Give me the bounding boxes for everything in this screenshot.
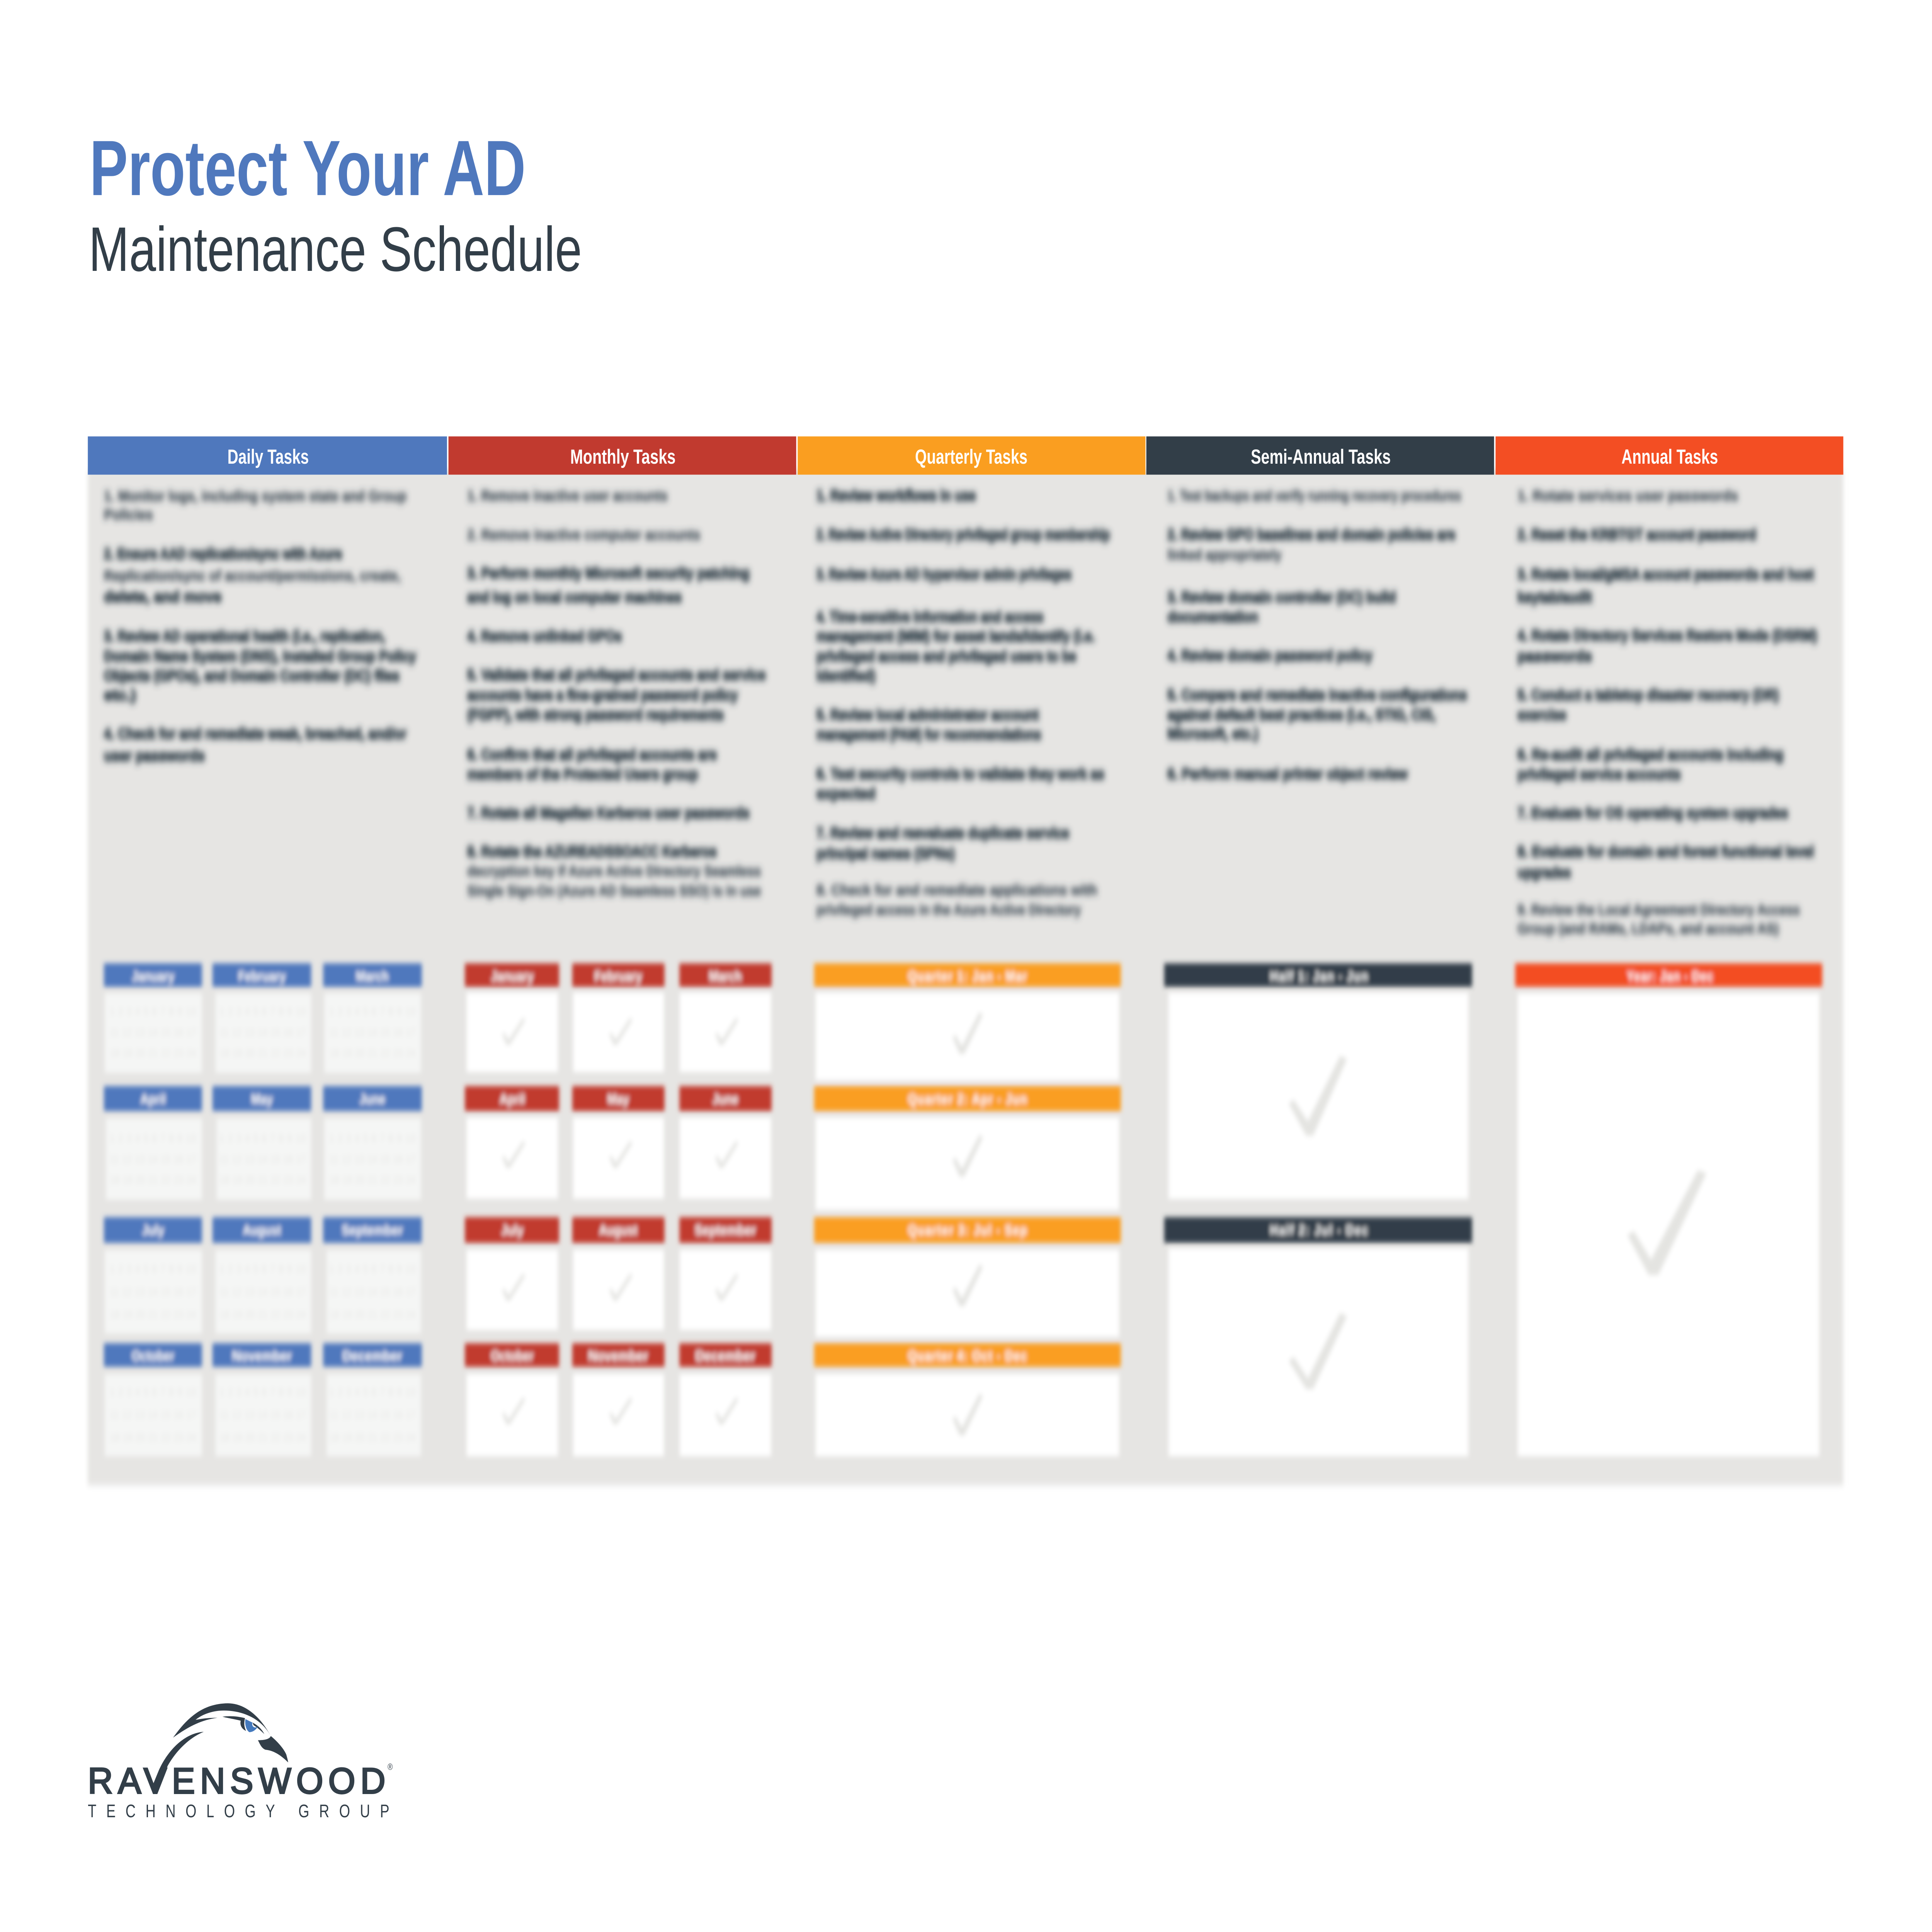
task list: daily: Replication/sync of account/permissions, create, — [104, 567, 401, 584]
month checklist: daily: 11 12 13 14 15 16 17 — [219, 1408, 306, 1421]
task list: annual: passwords — [1517, 647, 1592, 665]
task list: monthly: 3. Perform monthly Microsoft security patching — [467, 564, 750, 582]
month checklist: daily: 11 12 13 14 15 16 17 — [329, 1285, 416, 1298]
quarter checklist: Quarter 3: Jul - Sep — [908, 1223, 1027, 1238]
month checklist: daily: 1 2 3 4 5 6 7 8 9 10 — [329, 1386, 416, 1398]
quarter checklist: Quarter 4: Oct - Dec — [908, 1348, 1027, 1364]
month checklist: daily: 18 19 20 21 22 23 24 — [329, 1431, 416, 1444]
month checklist: daily: 11 12 13 14 15 16 17 — [219, 1026, 306, 1039]
month checklist: monthly: January — [491, 969, 534, 985]
task list: annual: 3. Rotate local/gMSA account passwords and host — [1517, 565, 1814, 583]
task list: quarterly: 2. Review Active Directory privileged group membership — [816, 526, 1110, 543]
task list: quarterly — [816, 486, 1110, 918]
month checklist: daily: May — [251, 1091, 273, 1107]
month checklist: daily: 11 12 13 14 15 16 17 — [329, 1408, 416, 1421]
month checklist: daily: November — [232, 1348, 292, 1364]
task list: daily — [104, 488, 417, 765]
month checklist: daily: 18 19 20 21 22 23 24 — [219, 1431, 306, 1444]
task list: monthly: 8. Rotate the AZUREADSSOACC Kerberos — [467, 843, 717, 861]
task list: annual: Group (and RAMs, LDAPs, and account AS) — [1517, 920, 1779, 937]
month checklist: daily: 11 12 13 14 15 16 17 — [110, 1408, 196, 1421]
task list: quarterly: 5. Review local administrator account — [816, 706, 1039, 724]
task list: daily: 2. Ensure AAD replication/sync with Azure — [104, 545, 342, 563]
task list: monthly: 2. Remove inactive computer accounts — [467, 526, 701, 543]
task list: annual — [1517, 487, 1817, 937]
task list: quarterly: 8. Check for and remediate applications with — [816, 882, 1097, 899]
task list: semi-annual: documentation — [1167, 608, 1259, 626]
header: Monthly Tasks: Monthly Tasks — [570, 446, 675, 468]
month checklist: daily: 1 2 3 4 5 6 7 8 9 10 — [219, 1386, 306, 1398]
task list: quarterly: privileged access in the Azure Active Directory — [816, 901, 1081, 918]
header: Semi-Annual Tasks: Semi-Annual Tasks — [1251, 446, 1391, 468]
task list: monthly: accounts have a fine-grained password policy — [467, 686, 738, 704]
month checklist: monthly: April — [500, 1091, 525, 1107]
half-year checklist: Half 2: Jul - Dec — [1270, 1223, 1368, 1238]
header: Annual Tasks: Annual Tasks — [1621, 446, 1718, 468]
task list: quarterly: management (PAM) for recommendations — [816, 726, 1041, 743]
month checklist: daily: 11 12 13 14 15 16 17 — [329, 1026, 416, 1039]
task list: semi-annual: 3. Review domain controller (DC) build — [1167, 588, 1396, 606]
subtitle: Maintenance Schedule: Maintenance Schedule — [89, 214, 582, 284]
month checklist: daily: 11 12 13 14 15 16 17 — [219, 1285, 306, 1298]
month checklist: daily: 11 12 13 14 15 16 17 — [329, 1153, 416, 1166]
icon: raven head — [153, 1703, 288, 1793]
month checklist: daily: 18 19 20 21 22 23 24 — [329, 1308, 416, 1321]
month checklist: monthly: July — [501, 1223, 524, 1238]
task list: quarterly: 7. Review and reevaluate duplicate service — [816, 824, 1069, 842]
task list: annual: privileged service accounts — [1517, 765, 1681, 783]
panel background — [88, 470, 1843, 1487]
task list: daily: delete, and move — [104, 588, 221, 605]
panel: daily tasks — [88, 436, 447, 1456]
month checklist: daily: December — [342, 1348, 402, 1364]
header: Daily Tasks: Daily Tasks — [228, 446, 309, 468]
task list: monthly — [467, 487, 766, 900]
half-year checklist — [1164, 963, 1472, 1456]
panel: monthly tasks — [449, 436, 796, 1456]
logo: Ravenswood Technology Group — [88, 1703, 393, 1821]
month checklist: daily: October — [132, 1348, 174, 1364]
task list: monthly: 7. Rotate all Magellan Kerberos user passwords — [467, 804, 750, 822]
quarter checklist: Quarter 2: Apr - Jun — [908, 1091, 1027, 1107]
task list: annual: keytab/audit — [1517, 588, 1592, 606]
year checklist: Year: Jan - Dec — [1627, 969, 1713, 985]
month checklist: daily: 18 19 20 21 22 23 24 — [219, 1308, 306, 1321]
half-year checklist: Half 1: Jan - Jun — [1270, 969, 1368, 985]
month checklist: monthly: December — [696, 1348, 755, 1364]
month checklist: daily: August — [243, 1223, 281, 1238]
month checklist: daily: 11 12 13 14 15 16 17 — [110, 1026, 196, 1039]
task list: monthly: members of the Protected Users group — [467, 765, 698, 783]
task list: daily: Objects (GPOs), and Domain Controller (DC) files — [104, 667, 400, 685]
month checklist: daily: 18 19 20 21 22 23 24 — [110, 1046, 196, 1060]
task list: quarterly: 1. Review workflows in use — [816, 486, 976, 504]
month checklist: daily: 11 12 13 14 15 16 17 — [110, 1285, 196, 1298]
task list: annual: 5. Conduct a tabletop disaster recovery (DR) — [1517, 686, 1779, 704]
header: Monthly Tasks — [449, 436, 796, 474]
header: Annual Tasks — [1495, 436, 1843, 474]
month checklist: daily: 1 2 3 4 5 6 7 8 9 10 — [329, 1262, 416, 1276]
month checklist: monthly: August — [599, 1223, 638, 1238]
month checklist: monthly: May — [607, 1091, 629, 1107]
month checklist: daily: 11 12 13 14 15 16 17 — [110, 1153, 196, 1166]
month checklist: monthly — [465, 963, 772, 1456]
month checklist: monthly: March — [709, 969, 742, 985]
task list: semi-annual — [1167, 487, 1467, 783]
task list: quarterly: 6. Test security controls to validate they work as — [816, 765, 1104, 783]
header: Daily Tasks — [88, 436, 447, 474]
header: Semi-Annual Tasks — [1146, 436, 1494, 474]
panel: annual tasks — [1495, 436, 1843, 1456]
month checklist: daily — [104, 963, 422, 1456]
task list: annual: 9. Review the Local Agreement Directory Access — [1517, 901, 1800, 918]
task list: monthly: and log on local computer machines — [467, 588, 682, 606]
month checklist: daily: 18 19 20 21 22 23 24 — [329, 1046, 416, 1060]
task list: daily: etc.) — [104, 686, 136, 704]
month checklist: daily: 18 19 20 21 22 23 24 — [329, 1173, 416, 1186]
month checklist: daily: 1 2 3 4 5 6 7 8 9 10 — [110, 1386, 196, 1398]
month checklist: daily: April — [140, 1091, 166, 1107]
month checklist: daily: 18 19 20 21 22 23 24 — [219, 1046, 306, 1060]
month checklist: daily: 1 2 3 4 5 6 7 8 9 10 — [110, 1262, 196, 1276]
header: Quarterly Tasks — [798, 436, 1145, 474]
task list: monthly: 1. Remove inactive user accounts — [467, 487, 668, 504]
task list: quarterly: privileged access and privileged users to be — [816, 647, 1077, 665]
month checklist: daily: 18 19 20 21 22 23 24 — [219, 1173, 306, 1186]
month checklist: daily: 18 19 20 21 22 23 24 — [110, 1431, 196, 1444]
task list: semi-annual: 4. Review domain password policy — [1167, 646, 1373, 664]
month checklist: daily: September — [342, 1223, 403, 1238]
task list: annual: 1. Rotate services user passwords — [1517, 487, 1738, 504]
registered mark: ® — [388, 1762, 393, 1772]
task list: quarterly: 3. Review Azure AD hypervisor admin privileges — [816, 565, 1071, 583]
month checklist: daily: 1 2 3 4 5 6 7 8 9 10 — [110, 1005, 196, 1018]
month checklist: monthly: June — [713, 1091, 738, 1107]
year checklist — [1515, 963, 1822, 1456]
task list: annual: upgrades — [1517, 864, 1571, 881]
month checklist: daily: 1 2 3 4 5 6 7 8 9 10 — [329, 1132, 416, 1145]
task list: annual: exercise — [1517, 706, 1566, 724]
month checklist: daily: 1 2 3 4 5 6 7 8 9 10 — [219, 1262, 306, 1276]
task list: monthly: 4. Remove unlinked GPOs — [467, 627, 622, 645]
task list: annual: 8. Evaluate for domain and forest functional level — [1517, 843, 1814, 861]
task list: monthly: (FGPP), with strong password requirements — [467, 706, 724, 724]
wordmark: RAVENSWOOD — [88, 1760, 391, 1801]
month checklist: daily: 18 19 20 21 22 23 24 — [110, 1308, 196, 1321]
header: Quarterly Tasks: Quarterly Tasks — [915, 446, 1027, 468]
tagline: TECHNOLOGY GROUP — [88, 1801, 389, 1821]
task list: annual: 6. Re-audit all privileged accounts including — [1517, 746, 1784, 764]
task list: quarterly: principal names (SPNs) — [816, 845, 955, 862]
month checklist: daily: 18 19 20 21 22 23 24 — [110, 1173, 196, 1186]
quarter checklist — [814, 963, 1121, 1456]
month checklist: monthly: February — [594, 969, 642, 985]
task list: daily: 1. Monitor logs, including system state and Group — [104, 488, 406, 505]
month checklist: daily: 1 2 3 4 5 6 7 8 9 10 — [110, 1132, 196, 1145]
task list: quarterly: expected — [816, 785, 876, 803]
month checklist: daily: March — [356, 969, 389, 985]
task list: monthly: 5. Validate that all privileged accounts and service — [467, 666, 766, 684]
month checklist: monthly: October — [491, 1348, 534, 1364]
month checklist: daily: February — [238, 969, 286, 985]
task list: monthly: Single Sign-On (Azure AD Seamless SSO) is in use — [467, 883, 761, 900]
task list: semi-annual: 1. Test backups and verify running recovery procedures — [1167, 487, 1461, 504]
task list: daily: 3. Review AD operational health (i.e., replication, — [104, 627, 386, 645]
task list: semi-annual: linked appropriately — [1167, 546, 1282, 563]
task list: semi-annual: against default best practices (i.e., STIG, CIS, — [1167, 706, 1436, 724]
task list: semi-annual: 2. Review GPO baselines and domain policies are — [1167, 526, 1456, 543]
task list: monthly: decryption key if Azure Active Directory Seamless — [467, 863, 761, 880]
task list: monthly: 6. Confirm that all privileged accounts are — [467, 746, 717, 764]
task list: daily: user passwords — [104, 747, 205, 765]
panel: quarterly tasks — [798, 436, 1145, 1456]
task list: semi-annual: Microsoft, etc.) — [1167, 725, 1259, 743]
task list: semi-annual: 5. Compare and remediate inactive configurations — [1167, 686, 1467, 704]
title — [89, 124, 582, 284]
panel: semi-annual tasks — [1146, 436, 1494, 1456]
task list: semi-annual: 6. Perform manual printer object review — [1167, 765, 1408, 783]
task list: daily: Domain Name System (DNS), installed Group Policy — [104, 647, 417, 665]
month checklist: daily: 1 2 3 4 5 6 7 8 9 10 — [219, 1132, 306, 1145]
month checklist: daily: January — [132, 969, 175, 985]
month checklist: daily: 1 2 3 4 5 6 7 8 9 10 — [329, 1005, 416, 1018]
task list: quarterly: identified) — [816, 667, 876, 685]
month checklist: monthly: September — [695, 1223, 756, 1238]
task list: daily: Policies — [104, 506, 153, 523]
month checklist: daily: June — [359, 1091, 385, 1107]
month checklist: monthly: November — [588, 1348, 648, 1364]
heading: Protect Your AD: Protect Your AD — [90, 124, 526, 212]
task list: annual: 7. Evaluate for OS operating system upgrades — [1517, 804, 1788, 822]
month checklist: daily: July — [142, 1223, 164, 1238]
quarter checklist: Quarter 1: Jan - Mar — [908, 969, 1027, 985]
task list: annual: 2. Reset the KRBTGT account password — [1517, 526, 1756, 543]
task list: annual: 4. Rotate Directory Services Restore Mode (DSRM) — [1517, 626, 1817, 644]
month checklist: daily: 1 2 3 4 5 6 7 8 9 10 — [219, 1005, 306, 1018]
task list: quarterly: management (MIM) for asset lands/identify (i.e. — [816, 627, 1095, 645]
task list: quarterly: 4. Time-sensitive information and access — [816, 608, 1044, 626]
task list: daily: 4. Check for and remediate weak, breached, and/or — [104, 725, 406, 743]
month checklist: daily: 11 12 13 14 15 16 17 — [219, 1153, 306, 1166]
